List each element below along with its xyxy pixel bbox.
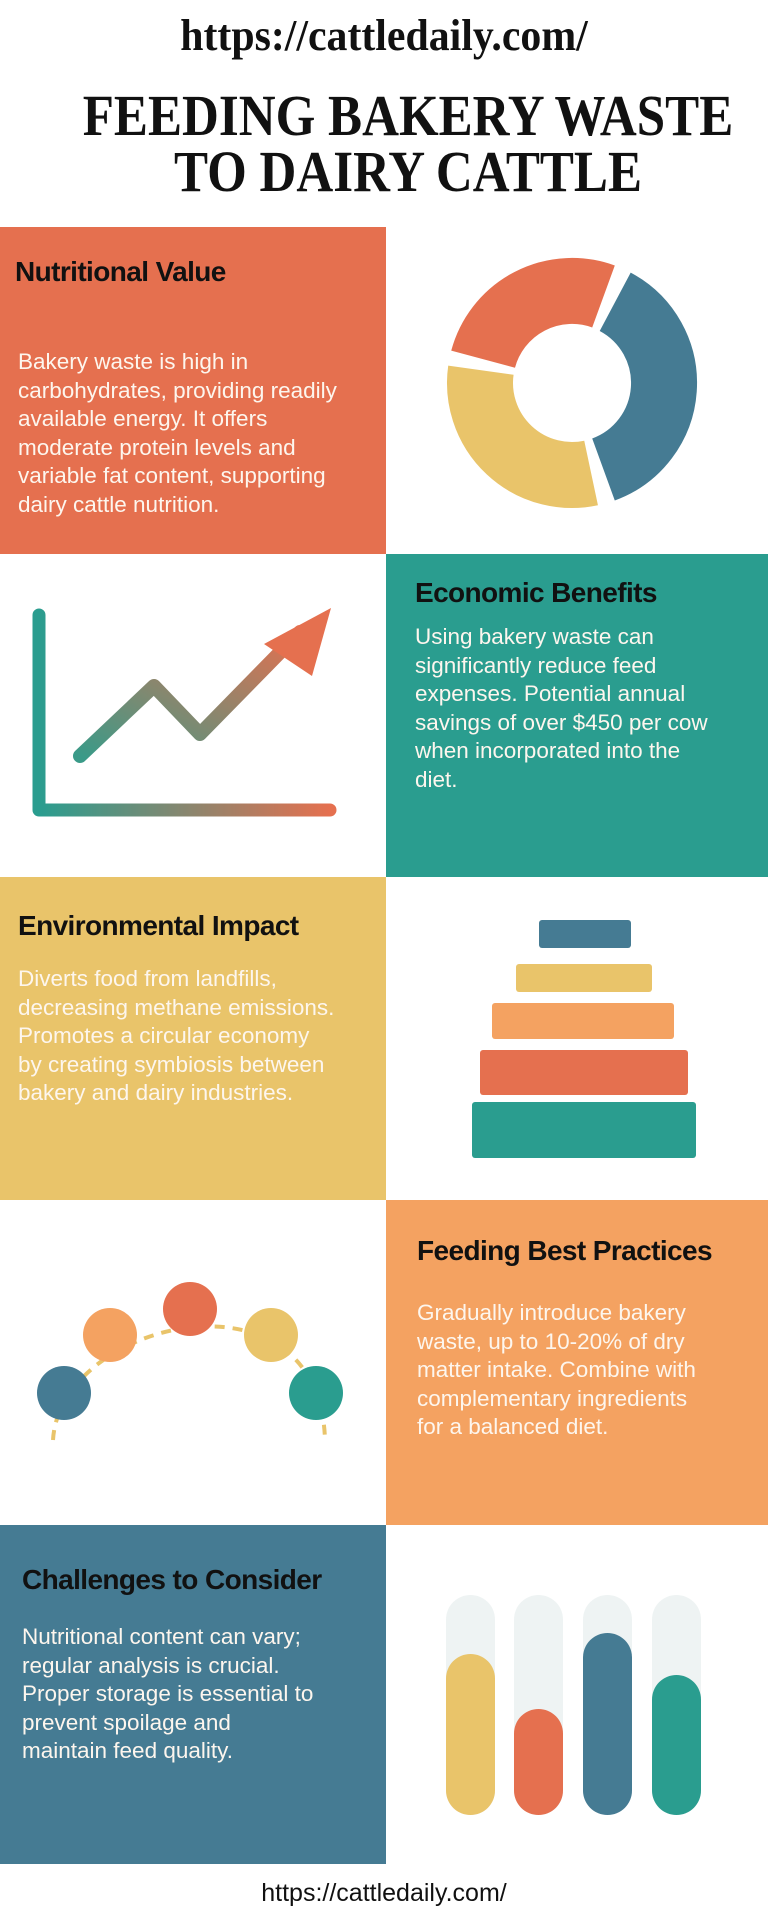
text: feeding best practices: Gradually introduce bakery bbox=[417, 1300, 686, 1325]
title: FEEDING BAKERY WASTE bbox=[83, 83, 733, 148]
title: TO DAIRY CATTLE bbox=[174, 139, 642, 204]
donut chart bbox=[447, 258, 698, 508]
text: environmental impact: by creating symbiosis between bbox=[18, 1052, 324, 1076]
text: nutritional value: available energy. It offers bbox=[18, 406, 267, 431]
text: challenges to consider: prevent spoilage and bbox=[22, 1710, 231, 1734]
url header: https://cattledaily.com/ bbox=[180, 11, 588, 60]
heading: nutritional value: Nutritional Value bbox=[15, 256, 226, 287]
text: nutritional value: carbohydrates, providing readily bbox=[18, 378, 337, 402]
stacked bars icon bbox=[472, 920, 696, 1158]
panel: nutritional value bbox=[0, 227, 386, 554]
text: nutritional value: variable fat content, supporting bbox=[18, 463, 326, 488]
text: economic benefits: expenses. Potential annual bbox=[415, 681, 685, 706]
progress bars icon bbox=[446, 1595, 701, 1815]
heading: environmental impact: Environmental Impact bbox=[18, 910, 299, 941]
text: feeding best practices: for a balanced diet. bbox=[417, 1414, 608, 1439]
footer url: https://cattledaily.com/ bbox=[261, 1879, 507, 1907]
text: challenges to consider: Proper storage is essential to bbox=[22, 1681, 313, 1706]
arc of circles icon bbox=[37, 1282, 343, 1440]
text: nutritional value: dairy cattle nutrition. bbox=[18, 492, 219, 516]
text: economic benefits: Using bakery waste can bbox=[415, 624, 654, 649]
text: economic benefits: significantly reduce feed bbox=[415, 652, 656, 678]
text: challenges to consider: maintain feed quality. bbox=[22, 1738, 233, 1763]
text: feeding best practices: matter intake. Combine with bbox=[417, 1357, 696, 1382]
text: feeding best practices bbox=[417, 1300, 696, 1439]
text: economic benefits: when incorporated into the bbox=[415, 738, 680, 763]
line chart icon bbox=[32, 608, 336, 816]
panel: economic benefits bbox=[386, 554, 768, 877]
text: economic benefits: diet. bbox=[415, 766, 458, 792]
text: environmental impact: Diverts food from landfills, bbox=[18, 966, 277, 991]
text: feeding best practices: complementary ingredients bbox=[417, 1386, 687, 1410]
text: nutritional value: Bakery waste is high in bbox=[18, 349, 248, 374]
text: environmental impact: decreasing methane emissions. bbox=[18, 994, 334, 1020]
text: feeding best practices: waste, up to 10-20% of dry bbox=[417, 1328, 685, 1354]
text: challenges to consider bbox=[22, 1624, 313, 1763]
text: economic benefits bbox=[415, 624, 708, 792]
text: challenges to consider: regular analysis is crucial. bbox=[22, 1652, 280, 1678]
heading: feeding best practices: Feeding Best Practices bbox=[417, 1235, 712, 1266]
text: environmental impact bbox=[18, 966, 334, 1105]
text: environmental impact: bakery and dairy industries. bbox=[18, 1080, 293, 1105]
title bbox=[83, 83, 733, 204]
text: economic benefits: savings of over $450 per cow bbox=[415, 710, 708, 734]
text: challenges to consider: Nutritional content can vary; bbox=[22, 1624, 301, 1649]
heading: economic benefits: Economic Benefits bbox=[415, 577, 657, 608]
heading: challenges to consider: Challenges to Consider bbox=[22, 1564, 322, 1595]
text: nutritional value bbox=[18, 349, 337, 516]
text: environmental impact: Promotes a circular economy bbox=[18, 1023, 309, 1048]
panel: feeding best practices bbox=[386, 1200, 768, 1525]
panel: environmental impact bbox=[0, 877, 386, 1200]
panel: challenges to consider bbox=[0, 1525, 386, 1864]
text: nutritional value: moderate protein levels and bbox=[18, 434, 296, 460]
